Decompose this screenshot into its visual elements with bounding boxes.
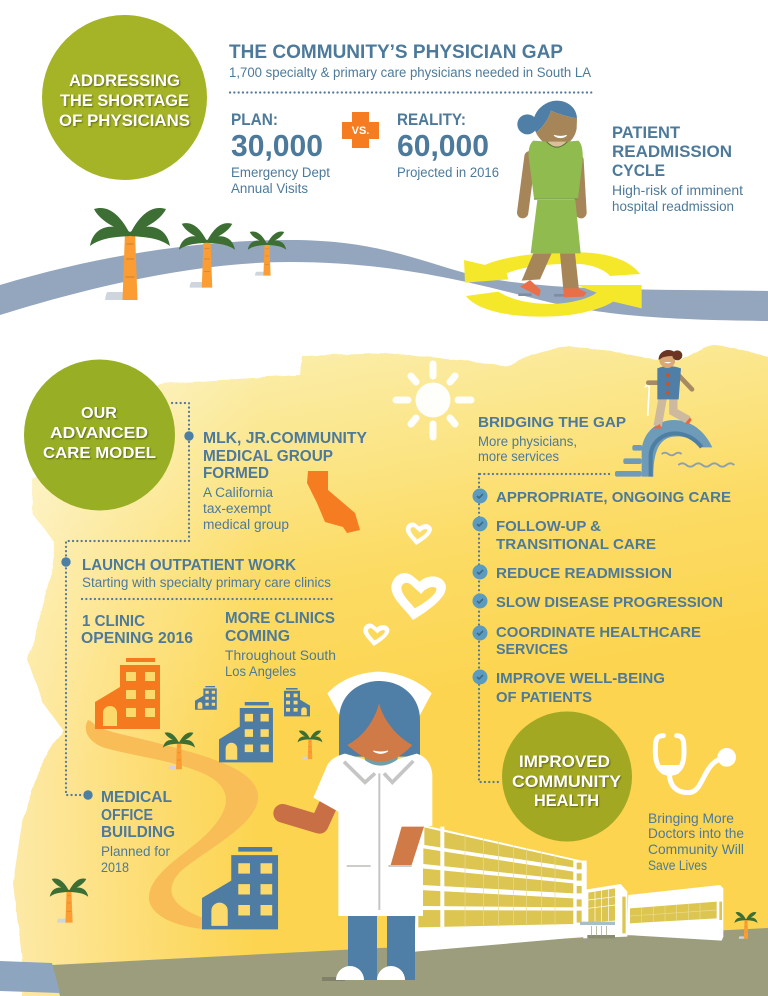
palm trees lower left	[50, 731, 322, 923]
icon: stethoscope	[655, 736, 736, 793]
text: medical office building: Planned for	[101, 843, 170, 859]
text: MLK medical group: A California	[203, 485, 273, 500]
check list labels: IMPROVE WELL-BEING	[496, 670, 665, 687]
circle: our advanced care model: OUR	[81, 405, 117, 422]
circle: improved community health	[502, 712, 632, 842]
text: bringing more doctors: Save Lives	[648, 857, 707, 873]
text: bringing more doctors	[648, 810, 744, 873]
check list labels: APPROPRIATE, ONGOING CARE	[496, 489, 731, 506]
text: launch outpatient work: LAUNCH OUTPATIENT WORK	[82, 557, 297, 574]
patient readmission cycle text: hospital readmission	[612, 198, 734, 214]
text: medical office building: BUILDING	[101, 824, 175, 841]
patient readmission cycle text: PATIENT	[612, 123, 681, 142]
text: bridging the gap: BRIDGING THE GAP	[478, 415, 626, 431]
circle: our advanced care model	[24, 360, 175, 510]
figure: patient on yellow cycle arrows	[464, 101, 642, 317]
text: bridging the gap: more services	[478, 449, 559, 464]
hospital building	[415, 825, 723, 952]
icon: California	[307, 471, 360, 533]
text: medical office building: OFFICE	[101, 807, 153, 824]
text: MLK medical group: tax-exempt	[203, 501, 271, 516]
icon: bridge with stepping person	[615, 350, 734, 477]
text: bringing more doctors: Doctors into the	[648, 825, 744, 841]
text: medical office building	[101, 789, 175, 875]
text: bringing more doctors: Bringing More	[648, 810, 734, 826]
text: more clinics coming: Throughout South	[225, 647, 336, 663]
icon: small blue buildings	[195, 686, 310, 762]
check list labels: OF PATIENTS	[496, 689, 592, 706]
check list labels: COORDINATE HEALTHCARE	[496, 624, 701, 641]
icon: orange clinic building	[95, 658, 160, 729]
circle: addressing the shortage: THE SHORTAGE	[60, 92, 189, 110]
circle: addressing the shortage: OF PHYSICIANS	[59, 112, 190, 130]
text: more clinics coming: COMING	[225, 628, 290, 645]
figure: nurse	[283, 672, 432, 981]
text: medical office building: MEDICAL	[101, 789, 172, 806]
figure: patient woman	[517, 101, 587, 297]
ground band left blue section	[0, 961, 60, 993]
icon: orange cross vs: VS.	[352, 125, 369, 137]
checklist of care benefits	[472, 488, 731, 706]
circle: addressing the shortage: ADDRESSING	[69, 72, 180, 90]
stat: plan: Emergency Dept	[231, 165, 330, 180]
circle: our advanced care model: CARE MODEL	[43, 445, 156, 462]
stat: plan: 30,000	[231, 128, 323, 163]
stat: reality	[397, 111, 499, 180]
text: more clinics coming: MORE CLINICS	[225, 610, 335, 627]
check list labels: FOLLOW-UP &	[496, 518, 601, 535]
timeline connector left	[61, 403, 194, 800]
stat: reality: REALITY:	[397, 111, 466, 129]
palm trees on road	[90, 208, 286, 300]
text: MLK medical group: FORMED	[203, 465, 269, 482]
check list labels: TRANSITIONAL CARE	[496, 536, 656, 553]
watercolor yellow background	[13, 345, 768, 996]
heading: community's physician gap	[229, 42, 592, 92]
text: medical office building: 2018	[101, 859, 129, 875]
palm tree right	[734, 912, 758, 939]
text: one clinic opening	[81, 613, 193, 647]
patient readmission cycle text	[612, 123, 743, 214]
patient readmission cycle text: READMISSION	[612, 142, 732, 161]
text: more clinics coming	[225, 610, 336, 679]
stat: plan: PLAN:	[231, 111, 278, 129]
heading: community's physician gap: THE COMMUNITY’S PHYSICIAN GAP	[229, 42, 563, 63]
check list labels: SERVICES	[496, 641, 568, 658]
circle: improved community health: HEALTH	[534, 792, 599, 810]
patient readmission cycle text: High-risk of imminent	[612, 182, 743, 198]
text: MLK medical group: MEDICAL GROUP	[203, 448, 333, 465]
stat: plan: Annual Visits	[231, 181, 308, 196]
circle: addressing the shortage	[42, 15, 207, 180]
text: MLK medical group: medical group	[203, 517, 289, 532]
icon: orange cross vs	[342, 112, 379, 148]
ground band	[52, 928, 768, 996]
check list labels: REDUCE READMISSION	[496, 565, 672, 582]
text: one clinic opening: 1 CLINIC	[82, 613, 145, 630]
circle: improved community health: IMPROVED	[519, 753, 610, 771]
icon: hearts	[363, 522, 446, 646]
text: bridging the gap: More physicians,	[478, 434, 577, 449]
heading: community's physician gap: 1,700 specialty & primary care physicians needed in South LA	[229, 65, 591, 80]
circle: our advanced care model: ADVANCED	[50, 425, 148, 442]
text: launch outpatient work: Starting with specialty primary care clinics	[82, 575, 331, 590]
text: one clinic opening: OPENING 2016	[81, 630, 193, 647]
text: launch outpatient work	[82, 557, 335, 599]
text: MLK medical group	[203, 430, 368, 532]
text: MLK medical group: MLK, JR.COMMUNITY	[203, 430, 368, 447]
patient readmission cycle text: CYCLE	[612, 161, 665, 180]
icon: large blue medical office building	[202, 847, 278, 929]
timeline connector right	[479, 474, 610, 782]
text: more clinics coming: Los Angeles	[225, 663, 296, 679]
winding path	[86, 720, 258, 929]
check icons	[472, 488, 488, 684]
circle: improved community health: COMMUNITY	[512, 773, 621, 791]
text: bridging the gap	[478, 415, 626, 464]
text: bringing more doctors: Community Will	[648, 841, 744, 857]
icon: upper cycle arrow	[464, 252, 640, 283]
icon: lower cycle arrow	[466, 285, 642, 317]
stat: plan	[231, 111, 330, 196]
check list labels	[496, 489, 731, 706]
icon: sun	[396, 364, 471, 437]
road top	[0, 240, 768, 321]
stat: reality: 60,000	[397, 128, 489, 163]
stat: reality: Projected in 2016	[397, 165, 499, 180]
check list labels: SLOW DISEASE PROGRESSION	[496, 594, 723, 611]
